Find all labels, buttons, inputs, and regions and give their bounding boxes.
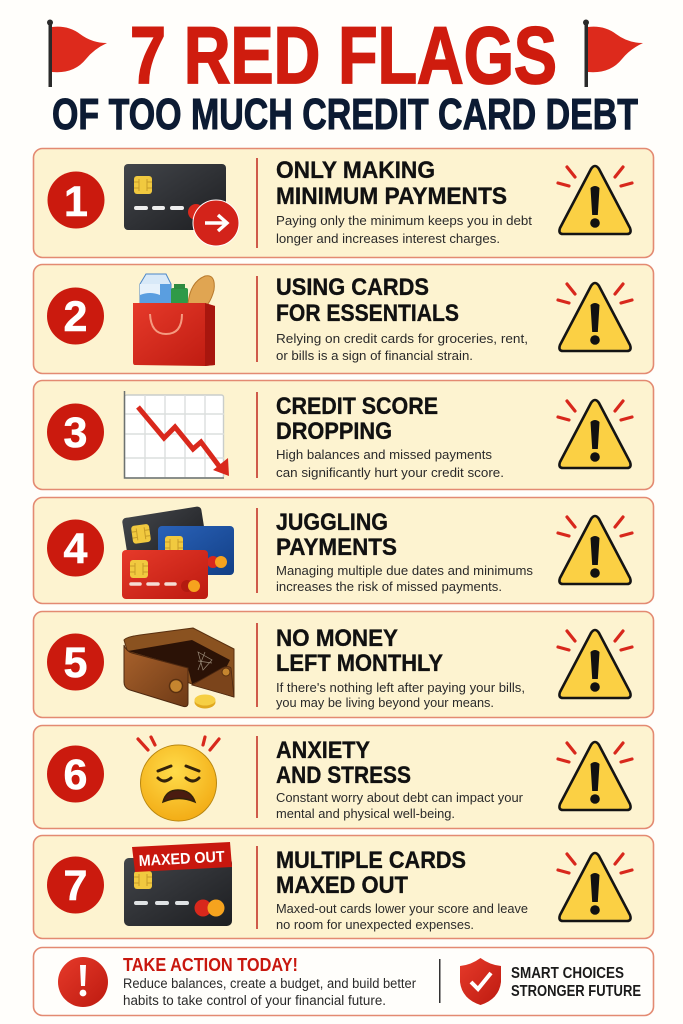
panel: take action <box>34 948 654 1016</box>
heading 1 <box>276 157 507 210</box>
heading 2 <box>276 274 459 327</box>
icon: warning <box>558 630 632 698</box>
heading 5: NO MONEY <box>276 625 398 652</box>
slogan: STRONGER FUTURE <box>511 983 641 1000</box>
slogan: SMART CHOICES <box>511 965 624 982</box>
number 5: 5 <box>64 639 87 687</box>
panel: flag 3 <box>34 380 654 490</box>
heading 6 <box>276 737 411 789</box>
description 6: mental and physical well-being. <box>276 806 455 821</box>
icon: maxed out card <box>124 842 232 926</box>
heading 4 <box>276 509 397 561</box>
heading 3: CREDIT SCORE <box>276 393 438 420</box>
description 7: Maxed-out cards lower your score and leave <box>276 901 528 916</box>
number 6 <box>47 746 104 802</box>
heading 7 <box>276 847 466 899</box>
action description: habits to take control of your financial future. <box>123 993 386 1008</box>
number 7: 7 <box>64 862 87 910</box>
description 5: you may be living beyond your means. <box>276 695 494 710</box>
heading 5: LEFT MONTHLY <box>276 650 443 677</box>
number 3 <box>47 404 104 460</box>
number 5 <box>47 634 104 690</box>
description 2: or bills is a sign of financial strain. <box>276 348 473 363</box>
heading 2: USING CARDS <box>276 274 429 301</box>
icon: credit card with arrow <box>124 164 239 246</box>
description 3: can significantly hurt your credit score. <box>276 465 504 480</box>
panel: flag 2 <box>34 264 654 374</box>
heading 6: ANXIETY <box>276 737 370 764</box>
description 3 <box>276 447 504 480</box>
heading 4: PAYMENTS <box>276 534 397 561</box>
number 1 <box>48 172 104 228</box>
number 6: 6 <box>64 751 87 799</box>
number 2 <box>47 288 104 344</box>
icon: left red flag <box>47 20 107 87</box>
icon: worried face <box>138 737 219 821</box>
heading 6: AND STRESS <box>276 762 411 789</box>
number 2: 2 <box>64 293 87 341</box>
icon: warning <box>558 742 632 810</box>
description 1 <box>276 213 532 246</box>
heading 5 <box>276 625 443 677</box>
description 5: If there's nothing left after paying your bills, <box>276 680 525 695</box>
number 1: 1 <box>64 178 88 226</box>
number 4 <box>47 520 104 576</box>
description 3: High balances and missed payments <box>276 447 493 462</box>
description 6: Constant worry about debt can impact your <box>276 790 524 805</box>
title: 7 RED FLAGS <box>130 11 557 101</box>
description 6 <box>276 790 524 821</box>
description 4 <box>276 563 534 594</box>
icon: maxed out card: MAXED OUT <box>138 848 226 870</box>
panel: flag 4 <box>34 498 654 604</box>
icon: exclamation circle <box>58 957 108 1007</box>
icon: warning <box>558 853 632 921</box>
icon: stacked cards <box>122 506 234 599</box>
heading 4: JUGGLING <box>276 509 388 536</box>
heading 2: FOR ESSENTIALS <box>276 300 459 327</box>
number 4: 4 <box>64 525 88 573</box>
icon: right red flag <box>583 20 643 87</box>
heading 1: ONLY MAKING <box>276 157 435 184</box>
action description: Reduce balances, create a budget, and build better <box>123 976 416 991</box>
panel: flag 7 <box>34 836 654 938</box>
heading 3 <box>276 393 438 445</box>
description 5 <box>276 680 525 710</box>
description 7 <box>276 901 528 932</box>
heading 7: MAXED OUT <box>276 872 408 899</box>
heading 3: DROPPING <box>276 418 392 445</box>
slogan <box>511 965 641 1000</box>
icon: empty wallet <box>124 628 234 708</box>
description 2 <box>276 331 528 363</box>
panel: flag 5 <box>34 612 654 718</box>
icon: warning <box>558 283 632 351</box>
description 1: Paying only the minimum keeps you in debt <box>276 213 532 228</box>
icon: shield <box>460 958 501 1005</box>
description 4: increases the risk of missed payments. <box>276 579 502 594</box>
number 3: 3 <box>64 409 87 457</box>
icon: grocery bag <box>133 274 215 366</box>
panel: flag 1 <box>34 148 654 258</box>
description 7: no room for unexpected expenses. <box>276 917 474 932</box>
description 2: Relying on credit cards for groceries, rent, <box>276 331 528 346</box>
icon: warning <box>558 166 632 234</box>
heading 7: MULTIPLE CARDS <box>276 847 466 874</box>
action heading: TAKE ACTION TODAY! <box>123 955 298 975</box>
action description <box>123 976 416 1008</box>
description 4: Managing multiple due dates and minimums <box>276 563 534 578</box>
icon: warning <box>558 516 632 584</box>
description 1: longer and increases interest charges. <box>276 231 500 246</box>
number 7 <box>47 856 104 914</box>
icon: falling chart <box>124 391 229 478</box>
panel: flag 6 <box>34 726 654 828</box>
heading 1: MINIMUM PAYMENTS <box>276 183 507 210</box>
icon: warning <box>558 400 632 468</box>
